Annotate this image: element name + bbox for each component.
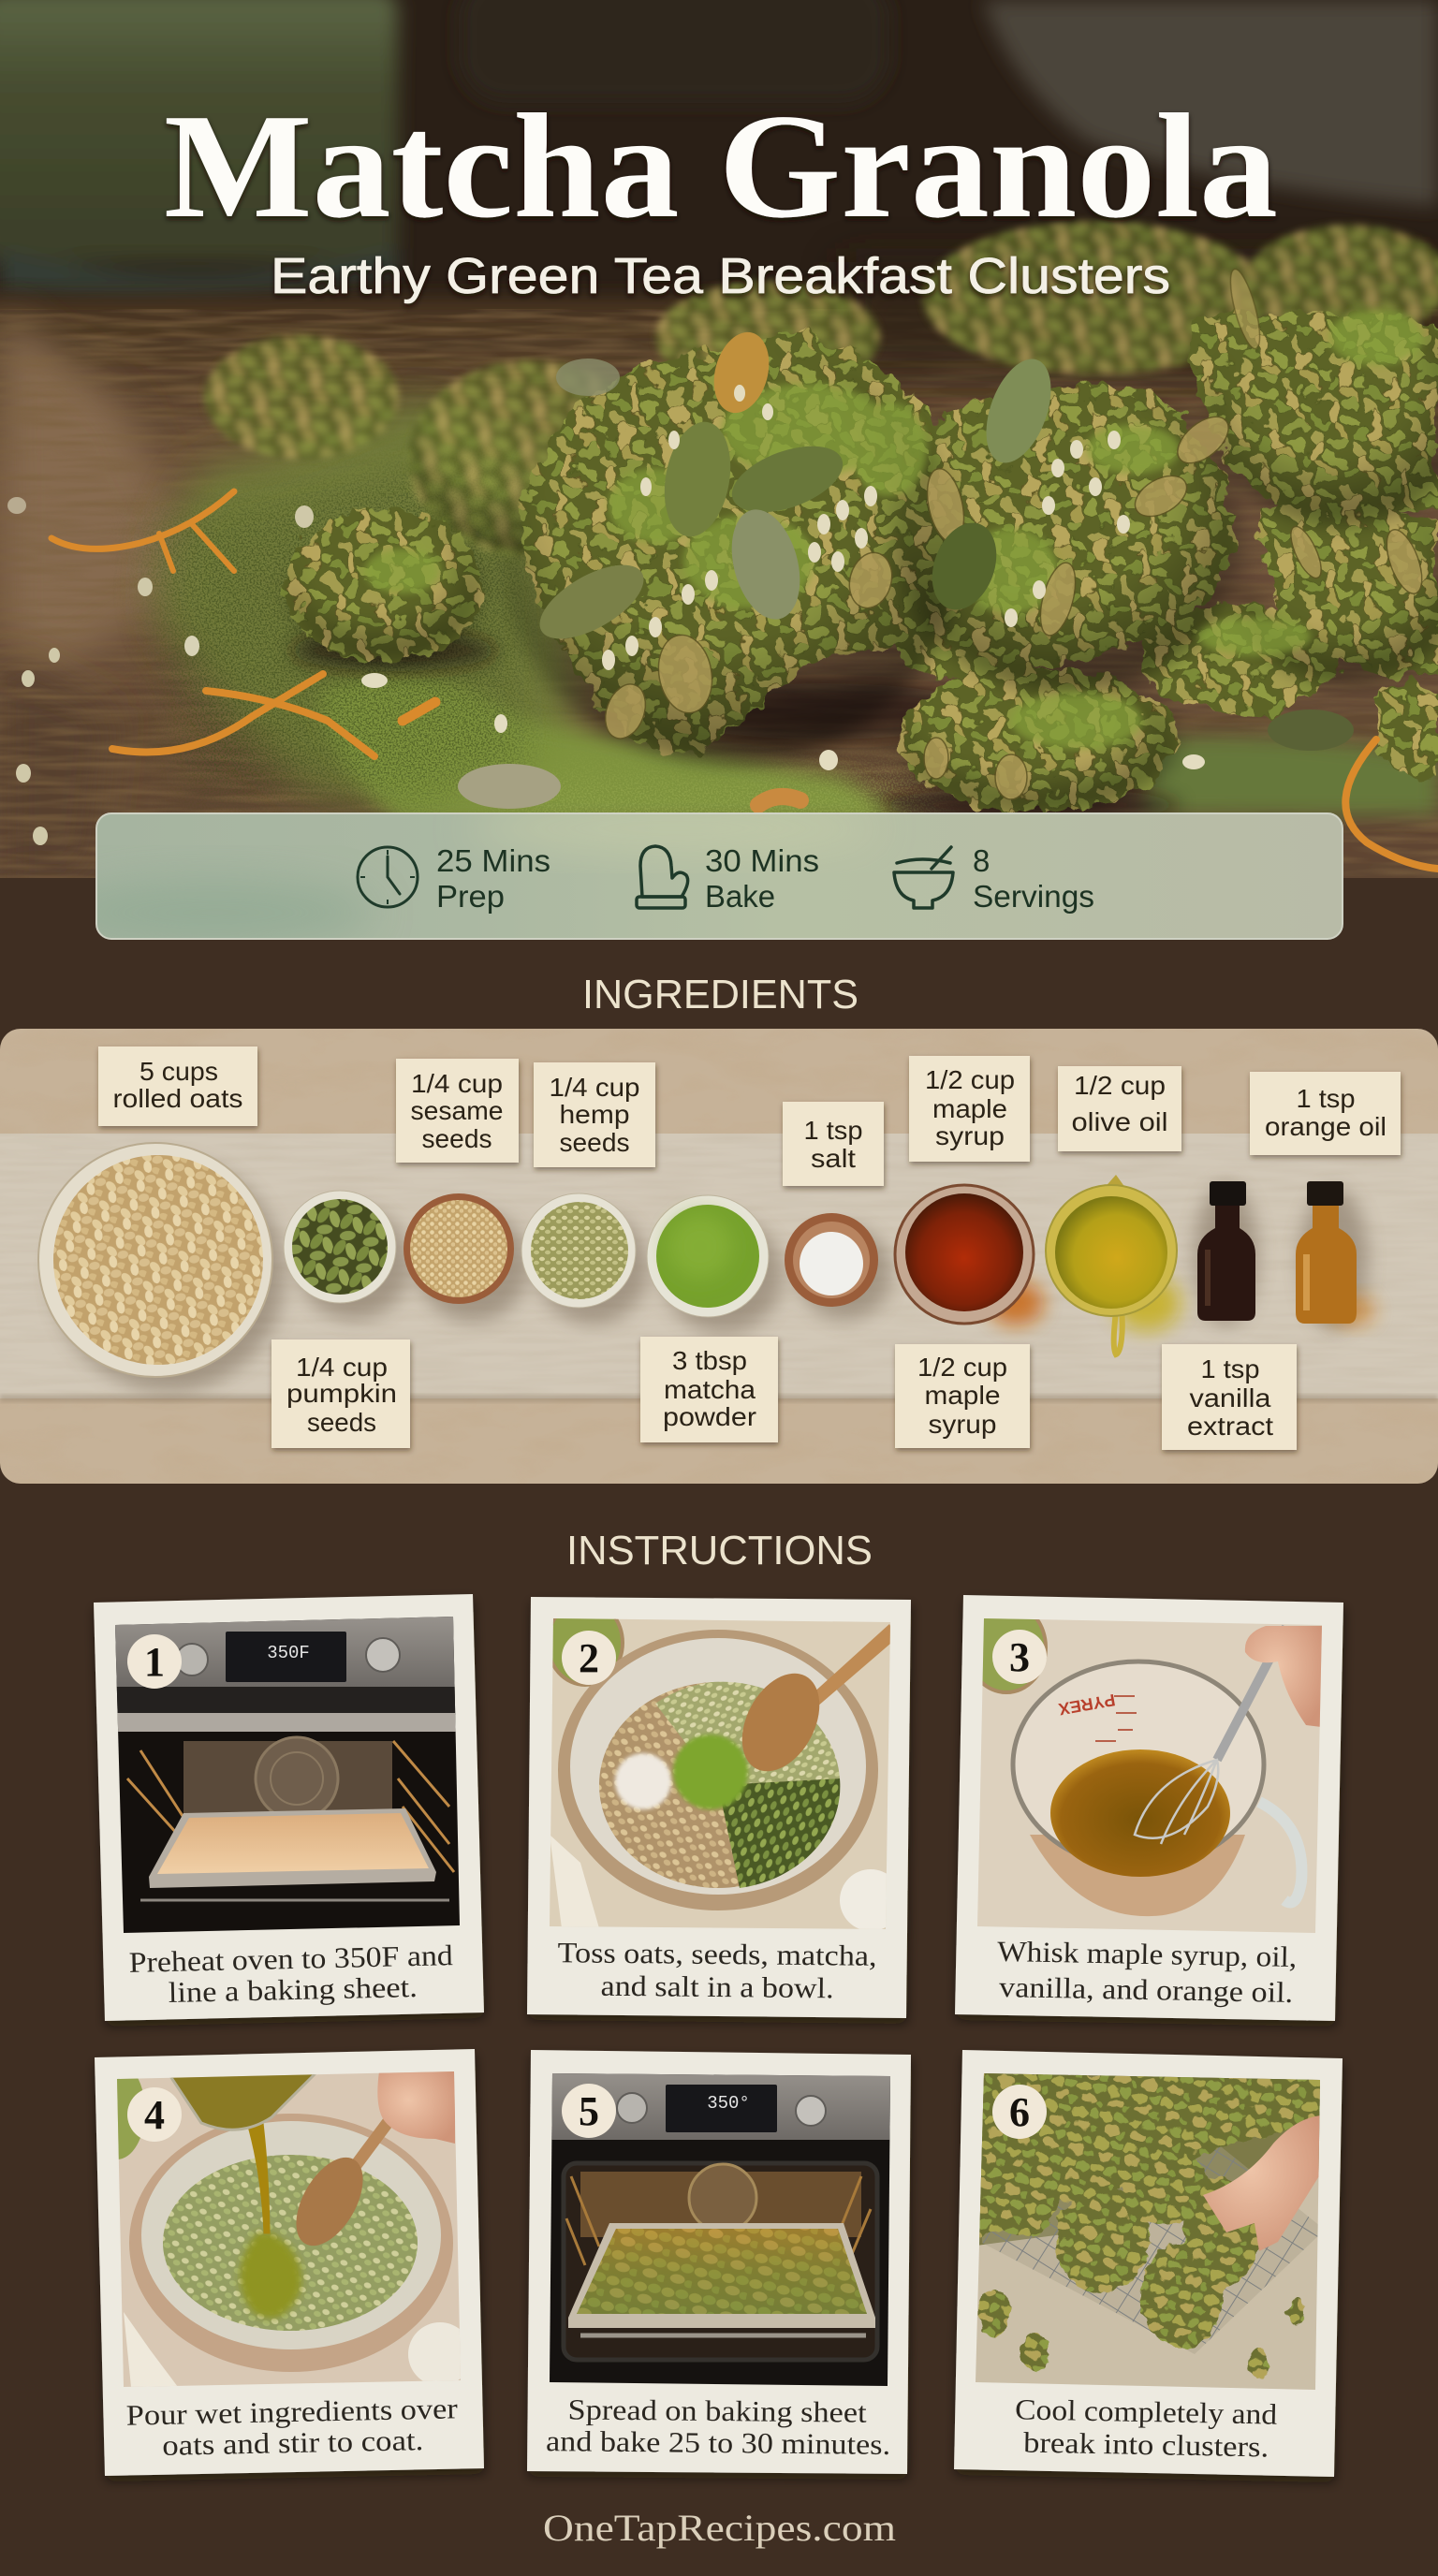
cluster shadows [290, 630, 1180, 822]
label: maple syrup top: 1/2 cup [925, 1065, 1015, 1094]
label: hemp seeds: hemp [560, 1100, 629, 1129]
label: rolled oats [98, 1046, 257, 1126]
photo: baking granola in oven: 350° [707, 2093, 750, 2114]
caption: step 4: oats and stir to coat. [162, 2423, 424, 2462]
photo: baking granola in oven [543, 2064, 899, 2392]
label: salt [783, 1102, 884, 1186]
badge: step 1 [127, 1634, 182, 1689]
label: hemp seeds: seeds [560, 1128, 629, 1157]
label: rolled oats: 5 cups [139, 1057, 218, 1086]
label: vanilla extract [1162, 1344, 1297, 1450]
icon: bowl with spoon [894, 847, 953, 908]
caption: step 5 [546, 2393, 890, 2461]
label: matcha powder: powder [663, 1402, 756, 1431]
photo: whisking wet ingredients: PYREX [1057, 1690, 1117, 1719]
icon: clock [358, 847, 418, 907]
label: salt: 1 tsp [803, 1116, 863, 1145]
caption: step 6 [1015, 2393, 1278, 2464]
pumpkin seeds on clusters [458, 326, 1354, 809]
label: matcha powder [640, 1337, 778, 1442]
bowl: pumpkin seeds [284, 1191, 396, 1303]
label: sesame seeds: 1/4 cup [411, 1069, 503, 1098]
label: salt: salt [811, 1144, 856, 1173]
glass pitcher: olive oil [1046, 1175, 1181, 1354]
text: servings: 8 [973, 843, 990, 878]
linen cloth [0, 1134, 1438, 1402]
caption: step 3: Whisk maple syrup, oil, [997, 1935, 1298, 1973]
label: hemp seeds: 1/4 cup [549, 1073, 640, 1102]
text: bake time: 30 Mins [705, 843, 819, 878]
label: vanilla extract: extract [1187, 1412, 1273, 1441]
hero photo: matcha granola clusters on wooden table [0, 0, 1438, 915]
label: sesame seeds: seeds [421, 1124, 492, 1153]
bowl: salt [785, 1213, 878, 1307]
caption: step 1: Preheat oven to 350F and [128, 1939, 454, 1979]
label: sesame seeds [396, 1059, 519, 1163]
label: pumpkin seeds [271, 1339, 410, 1448]
text: prep time: 25 Mins [436, 843, 550, 878]
wooden table [0, 290, 1438, 878]
bottle: orange oil [1296, 1181, 1375, 1325]
bowl: matcha powder [647, 1195, 769, 1317]
badge: step 2: 2 [579, 1635, 599, 1681]
label: matcha powder: matcha [664, 1375, 756, 1404]
cluster shading [285, 300, 1438, 812]
icon: oven mitt [637, 846, 688, 908]
label: pumpkin seeds: seeds [307, 1408, 376, 1437]
sesame seeds on clusters [7, 385, 1205, 845]
badge: step 4 [127, 2087, 182, 2142]
subtitle: Earthy Green Tea Breakfast Clusters [271, 248, 1170, 304]
footer: website: OneTapRecipes.com [543, 2507, 896, 2549]
label: orange oil: orange oil [1265, 1112, 1387, 1141]
photo: preheating oven: 350F [267, 1643, 310, 1663]
ingredient shadows [52, 1159, 1368, 1391]
blurred background jars and bowls [0, 0, 1438, 297]
label: olive oil: olive oil [1071, 1107, 1168, 1136]
caption: step 3: vanilla, and orange oil. [999, 1970, 1294, 2009]
glass bowl: maple syrup [895, 1185, 1044, 1325]
far background clusters [204, 221, 1438, 557]
panel: ingredients [0, 1029, 1438, 1484]
step 4 card [89, 2049, 484, 2476]
badge: step 1: 1 [144, 1639, 165, 1685]
caption: step 1: line a baking sheet. [168, 1970, 418, 2009]
text: bake time: Bake [705, 879, 775, 914]
step 2 card [527, 1597, 911, 2018]
label: maple syrup top: maple [932, 1094, 1007, 1123]
caption: step 1 [128, 1939, 454, 2009]
badge: step 5 [562, 2084, 616, 2138]
label: pumpkin seeds: 1/4 cup [296, 1353, 388, 1382]
label: maple syrup bottom: 1/2 cup [917, 1353, 1007, 1382]
text: bake time [705, 843, 819, 914]
label: orange oil: 1 tsp [1296, 1084, 1356, 1113]
photo: cooling clusters on rack [969, 2064, 1325, 2392]
bowl: rolled oats [38, 1143, 272, 1377]
heading: ingredients: INGREDIENTS [582, 972, 858, 1017]
caption: step 3 [997, 1935, 1298, 2009]
badge: step 2 [562, 1631, 616, 1685]
badge: step 6 [992, 2085, 1047, 2139]
matcha powder dusting [150, 393, 1438, 828]
label: maple syrup bottom [895, 1344, 1030, 1448]
badge: step 5: 5 [579, 2088, 599, 2134]
label: olive oil: 1/2 cup [1074, 1071, 1166, 1100]
label: matcha powder: 3 tbsp [672, 1346, 747, 1375]
granola clusters [285, 311, 1438, 812]
matcha coating patches [365, 309, 1423, 749]
label: sesame seeds: sesame [410, 1096, 504, 1125]
tan oat flakes on clusters [598, 267, 1429, 799]
text: prep time [436, 843, 550, 914]
label: vanilla extract: 1 tsp [1200, 1354, 1260, 1383]
caption: step 5: Spread on baking sheet [567, 2393, 867, 2429]
title: Matcha Granola [164, 82, 1278, 249]
label: vanilla extract: vanilla [1189, 1383, 1271, 1412]
step 6 card [954, 2050, 1343, 2477]
caption: step 4: Pour wet ingredients over [125, 2392, 459, 2432]
step 5 card [527, 2050, 911, 2474]
label: rolled oats: rolled oats [112, 1084, 243, 1113]
text: servings [973, 843, 1094, 914]
caption: step 2: and salt in a bowl. [600, 1969, 834, 2004]
badge: step 3: 3 [1009, 1634, 1030, 1680]
label: orange oil [1250, 1072, 1401, 1155]
caption: step 4 [125, 2392, 459, 2462]
step 3 card [955, 1595, 1343, 2021]
step 1 card [94, 1594, 484, 2021]
caption: step 2: Toss oats, seeds, matcha, [557, 1936, 877, 1972]
stats panel [56, 806, 1343, 946]
label: maple syrup top: syrup [935, 1121, 1005, 1150]
photo: dry ingredients in bowl [543, 1601, 902, 1938]
photo: preheating oven [103, 1610, 468, 1938]
badge: step 6: 6 [1009, 2089, 1030, 2135]
bowl: hemp seeds [521, 1193, 636, 1308]
label: maple syrup bottom: maple [925, 1381, 1000, 1410]
heading: instructions: INSTRUCTIONS [566, 1528, 873, 1573]
badge: step 4: 4 [144, 2092, 165, 2138]
photo: pouring oil over oats [89, 2062, 472, 2392]
caption: step 6: break into clusters. [1023, 2425, 1269, 2464]
label: maple syrup top [909, 1056, 1030, 1162]
label: olive oil [1058, 1066, 1181, 1151]
label: pumpkin seeds: pumpkin [286, 1379, 397, 1408]
orange zest curls [51, 491, 1438, 869]
caption: step 2 [557, 1936, 877, 2004]
text: servings: Servings [973, 879, 1094, 914]
bottle: vanilla extract [1197, 1181, 1255, 1321]
photo: whisking wet ingredients [967, 1603, 1325, 1938]
badge: step 3 [992, 1630, 1047, 1684]
label: hemp seeds [534, 1062, 655, 1167]
label: maple syrup bottom: syrup [929, 1410, 996, 1439]
caption: step 5: and bake 25 to 30 minutes. [546, 2424, 890, 2461]
bowl: sesame seeds [404, 1193, 514, 1304]
text: prep time: Prep [436, 879, 505, 914]
caption: step 6: Cool completely and [1015, 2393, 1278, 2431]
labels [98, 1046, 1401, 1450]
